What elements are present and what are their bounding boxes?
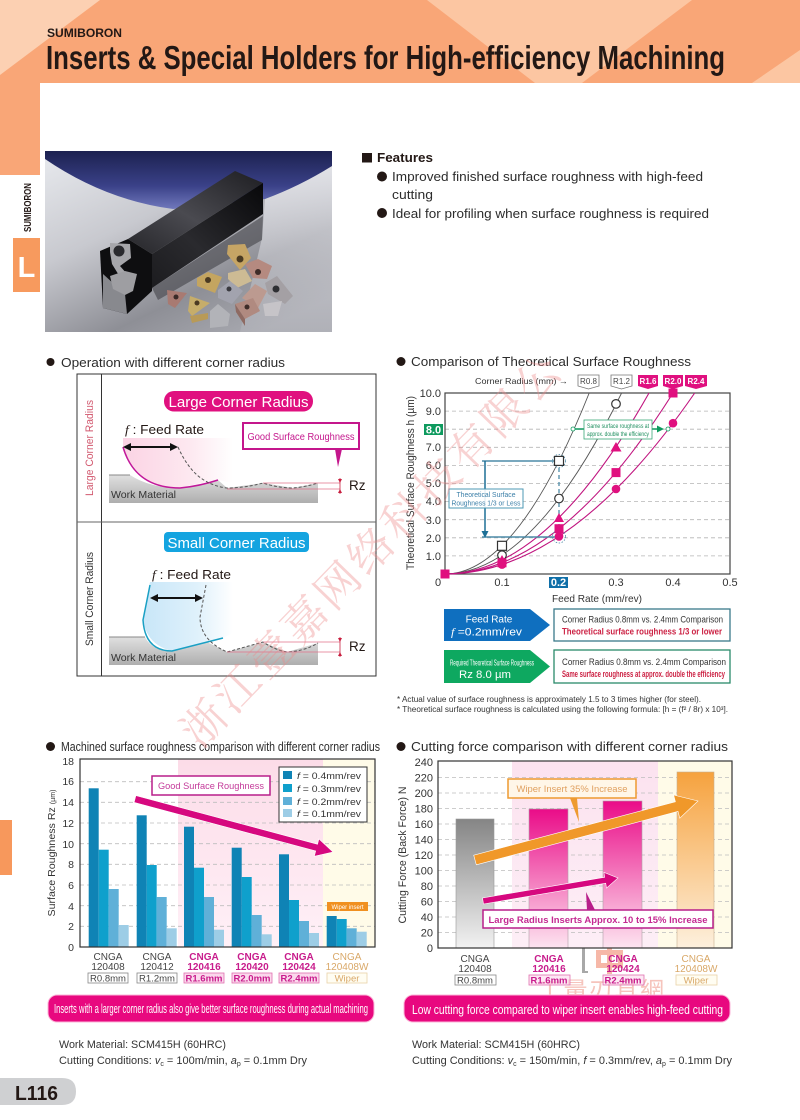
x label R1.2: CNGA	[143, 952, 172, 963]
efficiency callout	[584, 420, 652, 439]
large tool shade	[123, 438, 233, 488]
x axis labels: 0	[435, 577, 441, 589]
y axis labels: 220	[415, 772, 433, 784]
feature 2: Ideal for profiling when surface roughness is required	[392, 207, 709, 221]
y axis labels: 20	[421, 928, 433, 940]
x label R1.6	[184, 952, 224, 984]
roughness curves	[445, 393, 695, 574]
conditions: right chart: Cutting Conditions: v	[412, 1055, 513, 1067]
heading: machined roughness: Machined surface roughness comparison with different corner radius	[61, 740, 380, 754]
callout: feed rate: Feed Rate	[466, 614, 513, 626]
x label R1.6: 120416	[187, 962, 221, 973]
y axis labels: 6	[68, 880, 74, 892]
wiper insert tag: Wiper insert	[331, 905, 364, 911]
x label R2.4: 120424	[606, 964, 640, 975]
feature 1	[377, 170, 703, 202]
heading: operation: Operation with different corner radius	[61, 355, 286, 370]
corner radius key: Corner Radius (mm) →	[475, 376, 568, 386]
bars R1.2	[137, 815, 177, 947]
x label R2.4: CNGA	[608, 954, 638, 965]
small feed arrow	[150, 594, 203, 602]
bars R2.4	[279, 854, 319, 947]
conditions: left chart: c	[160, 1061, 164, 1068]
large tool outline	[123, 447, 218, 488]
chart frame	[80, 759, 375, 947]
bars R1.6	[184, 827, 224, 947]
conditions: left chart: = 0.1mm Dry	[241, 1055, 307, 1067]
plot frame and grid	[445, 393, 730, 574]
x label R2.4: R2.4mm	[605, 976, 641, 986]
banner: surface roughness conclusion: Inserts with a larger corner radius also give better surface roughness during actual machining	[54, 1001, 368, 1016]
feature 1: cutting	[392, 188, 433, 202]
wiper callout	[508, 779, 636, 822]
x label R1.2: 120412	[140, 962, 174, 973]
y axis labels: 4	[68, 901, 74, 913]
heading: cutting force: Cutting force comparison with different corner radius	[411, 739, 729, 754]
page header band	[0, 0, 800, 175]
small tool outline	[143, 585, 223, 651]
conditions: right chart: = 150m/min,	[517, 1055, 583, 1067]
x label R2.4: 120424	[282, 962, 316, 973]
side marker	[0, 820, 12, 875]
legend: f = 0.1mm/rev	[297, 809, 361, 820]
y axis labels: 5.0	[426, 478, 441, 490]
x label R2.0: CNGA	[237, 952, 267, 963]
theoretical 1/3 callout	[449, 489, 523, 508]
conditions: left chart: a	[231, 1055, 237, 1067]
large radius callout: Large Radius Inserts Approx. 10 to 15% Increase	[488, 915, 708, 926]
large Rz mark: Rz	[349, 478, 366, 493]
feature 1: Improved finished surface roughness with high-feed	[392, 170, 703, 184]
legend: f = 0.4mm/rev	[297, 771, 361, 782]
callout: feed rate	[444, 609, 550, 641]
callout: required roughness comparison	[554, 650, 730, 683]
corner radius key: R2.4	[688, 377, 705, 386]
y axis labels: 10	[62, 839, 74, 851]
bars wiper	[327, 916, 367, 947]
x label wiper: Wiper	[684, 976, 708, 986]
corner radius key: R0.8	[580, 377, 597, 386]
good surface roughness callout	[243, 423, 359, 467]
x axis title: Feed Rate (mm/rev)	[552, 593, 642, 605]
product photo	[45, 151, 332, 332]
large work material	[109, 475, 318, 503]
chart background	[438, 761, 732, 948]
markers R0.8	[498, 456, 564, 550]
conditions: left chart: = 100m/min,	[164, 1055, 231, 1067]
conditions: left chart: p	[237, 1061, 241, 1068]
small Rz mark	[227, 637, 366, 657]
banner: surface roughness conclusion	[48, 995, 374, 1022]
inserts	[167, 244, 293, 328]
y axis labels: 80	[421, 881, 433, 893]
good surface roughness callout	[152, 776, 270, 795]
y axis labels: 14	[62, 797, 74, 809]
x axis highlight 0.2: 0.2	[551, 577, 566, 589]
efficiency callout: Same surface roughness at	[587, 423, 649, 430]
x label wiper	[675, 954, 718, 986]
efficiency arrow	[571, 426, 670, 432]
corner radius key: R2.0	[665, 377, 682, 386]
y axis labels: 16	[62, 776, 74, 788]
comparison guides at feed 0.2	[482, 454, 566, 543]
y axis labels: 2	[68, 921, 74, 933]
footnotes: * Theoretical surface roughness is calculated using the following formula: [h = (f² / 8r) x 10³].	[397, 705, 728, 714]
wiper increase arrow	[474, 795, 698, 865]
y axis title: Theoretical Surface Roughness h (µm)	[405, 396, 417, 570]
y axis labels: 2.0	[426, 533, 441, 545]
theoretical 1/3 callout: Roughness 1/3 or Less	[452, 500, 521, 508]
x label R1.6	[529, 954, 570, 986]
markers R2.4	[498, 419, 677, 569]
x label R2.4	[279, 952, 319, 984]
large Rz mark	[227, 478, 366, 494]
x label R0.8: CNGA	[94, 952, 123, 963]
y axis labels: 9.0	[426, 406, 441, 418]
x label R0.8: R0.8mm	[457, 976, 493, 986]
y axis labels: 1.0	[426, 551, 441, 563]
watermark: lower logo	[538, 945, 666, 1006]
small radius pill: Small Corner Radius	[168, 535, 306, 552]
conditions: right chart: Work Material: SCM415H (60HRC)	[412, 1039, 580, 1051]
y axis labels: 100	[415, 866, 433, 878]
bar R1.6	[529, 809, 568, 948]
x label wiper: 120408W	[326, 962, 369, 973]
callout: required roughness: Rz 8.0 µm	[459, 669, 511, 681]
y axis labels: 10.0	[420, 388, 441, 400]
section tab: L	[13, 238, 40, 292]
conditions: left chart	[59, 1039, 307, 1068]
conditions: right chart	[412, 1039, 732, 1068]
x label wiper: CNGA	[682, 954, 711, 965]
y axis labels: 4.0	[426, 496, 441, 508]
callout: required roughness comparison: Corner Radius 0.8mm vs. 2.4mm Comparison	[562, 657, 726, 667]
y axis labels: 6.0	[426, 460, 441, 472]
small feed rate label: f : Feed Rate	[152, 567, 231, 582]
wiper insert tag	[327, 902, 368, 911]
markers R1.2	[498, 400, 620, 560]
y axis labels	[415, 757, 433, 955]
x label R2.4: CNGA	[284, 952, 314, 963]
callout: required roughness: Required Theoretical Surface Roughness	[450, 658, 534, 668]
features heading: Features	[377, 151, 433, 165]
x label R1.6: CNGA	[189, 952, 219, 963]
markers R1.6	[497, 442, 622, 564]
theoretical 1/3 callout: Theoretical Surface	[456, 492, 516, 499]
y axis title: Cutting Force (Back Force) N	[397, 786, 409, 924]
side label: SUMIBORON: SUMIBORON	[23, 183, 34, 232]
x axis labels	[435, 577, 738, 589]
trend arrow	[134, 796, 333, 856]
y axis labels: 140	[415, 834, 433, 846]
large radius increase arrow	[482, 872, 618, 904]
large tool previous pass	[178, 447, 318, 488]
y axis labels: 12	[62, 818, 74, 830]
legend	[279, 767, 367, 822]
y axis labels: 240	[415, 757, 433, 769]
y axis labels: 200	[415, 788, 433, 800]
side label large: Large Corner Radius	[84, 400, 96, 496]
large feed arrow	[123, 443, 178, 451]
y axis labels: 0	[427, 943, 433, 955]
corner radius key: R1.2	[613, 377, 630, 386]
x label R1.2	[137, 952, 177, 984]
page number: L116	[15, 1083, 58, 1105]
features list	[362, 151, 709, 221]
large work material: Work Material	[111, 489, 176, 501]
x label wiper: CNGA	[333, 952, 362, 963]
y axis labels: 3.0	[426, 515, 441, 527]
bar chart: cutting force	[397, 757, 732, 986]
x label R2.0	[232, 952, 272, 984]
x axis labels: 0.3	[608, 577, 624, 589]
callout: feed rate: f =0.2mm/rev	[451, 626, 523, 638]
clamp	[110, 243, 137, 295]
y axis labels: 7.0	[426, 442, 441, 454]
banner: cutting force conclusion: Low cutting force compared to wiper insert enables high-feed cutting	[412, 1002, 723, 1017]
x label R0.8: 120408	[458, 964, 492, 975]
x label R1.2: R1.2mm	[139, 974, 175, 984]
panel: corner radius diagrams	[77, 374, 376, 676]
good surface roughness callout: Good Surface Roughness	[158, 781, 264, 792]
y axis labels: 18	[62, 756, 74, 768]
conditions: left chart: Work Material: SCM415H (60HRC)	[59, 1039, 226, 1051]
x label R2.4: R2.4mm	[281, 974, 317, 984]
heading: theoretical roughness: Comparison of Theoretical Surface Roughness	[411, 354, 692, 369]
callout: required roughness	[444, 650, 550, 683]
x label R2.0: R2.0mm	[234, 974, 270, 984]
bar R2.4	[603, 801, 642, 948]
callout: feed rate comparison: Corner Radius 0.8mm vs. 2.4mm Comparison	[562, 614, 723, 624]
side label small: Small Corner Radius	[84, 552, 96, 646]
x label R1.6: R1.6mm	[531, 976, 567, 986]
x label wiper: Wiper	[335, 974, 359, 984]
footnotes: * Actual value of surface roughness is approximately 1.5 to 3 times higher (for steel).	[397, 695, 701, 704]
y axis labels	[62, 756, 74, 954]
x label R0.8	[455, 954, 496, 986]
x label R1.6: 120416	[532, 964, 566, 975]
x label R0.8	[88, 952, 128, 984]
small tool previous pass	[200, 585, 318, 652]
conditions: left chart: Cutting Conditions: v	[59, 1055, 160, 1067]
large feed rate label: f : Feed Rate	[125, 422, 204, 437]
callout: feed rate comparison	[554, 609, 730, 641]
watermark: lower logo: 工量刃具網	[538, 971, 666, 1006]
brand label: SUMIBORON	[47, 28, 122, 40]
y axis labels: 120	[415, 850, 433, 862]
page number	[0, 1078, 76, 1105]
chart background	[80, 759, 375, 947]
corner radius key	[475, 375, 707, 389]
y axis labels	[420, 388, 441, 563]
bar wiper	[677, 772, 714, 948]
bar R0.8	[456, 819, 494, 948]
x label R2.0: 120420	[235, 962, 269, 973]
small tool shade	[143, 582, 233, 651]
x label R0.8: CNGA	[461, 954, 490, 965]
legend: f = 0.2mm/rev	[297, 797, 361, 808]
small work material	[109, 637, 318, 665]
chart frame	[438, 761, 732, 948]
y axis labels: 60	[421, 896, 433, 908]
y axis labels: 180	[415, 804, 433, 816]
y axis labels: 8	[68, 859, 74, 871]
large radius callout	[483, 892, 713, 928]
large radius pill: Large Corner Radius	[168, 394, 308, 411]
x label wiper	[326, 952, 369, 984]
markers R2.0	[440, 388, 678, 578]
conditions: right chart: f = 0.3mm/rev, a	[583, 1055, 662, 1067]
banner: cutting force conclusion	[404, 995, 730, 1022]
wiper callout: Wiper Insert 35% Increase	[516, 784, 628, 795]
section tab: L: L	[18, 252, 35, 284]
x axis labels: 0.1	[494, 577, 510, 589]
x label wiper: 120408W	[675, 964, 718, 975]
conditions: right chart: = 0.1mm Dry	[666, 1055, 732, 1067]
callout: required roughness comparison: Same surface roughness at approx. double the efficiency	[562, 669, 725, 679]
conditions: right chart: c	[513, 1061, 517, 1068]
y axis labels: 40	[421, 912, 433, 924]
bar chart: surface roughness	[46, 756, 375, 984]
small Rz mark: Rz	[349, 639, 366, 654]
legend: f = 0.3mm/rev	[297, 784, 361, 795]
x label R1.6: CNGA	[534, 954, 564, 965]
good surface roughness callout: Good Surface Roughness	[248, 431, 354, 443]
x label R1.6: R1.6mm	[186, 974, 222, 984]
watermark: diagonal company name: 浙江壹嘉网络科技有限公	[163, 335, 576, 759]
y axis title: Surface Roughness Rz (µm)	[46, 790, 58, 916]
small work material: Work Material	[111, 652, 176, 664]
y axis highlight 8.0: 8.0	[426, 424, 441, 436]
conditions: right chart: p	[662, 1061, 666, 1068]
y axis labels: 0	[68, 942, 74, 954]
footnotes	[397, 695, 728, 714]
callout: feed rate comparison: Theoretical surface roughness 1/3 or lower	[562, 626, 722, 636]
bars R0.8	[89, 788, 129, 947]
x label R0.8: 120408	[91, 962, 125, 973]
bars R2.0	[232, 848, 272, 947]
corner radius key: R1.6	[640, 377, 657, 386]
efficiency callout: approx. double the efficiency	[587, 431, 650, 438]
x label R2.4	[603, 954, 644, 986]
y axis labels: 160	[415, 819, 433, 831]
x label R0.8: R0.8mm	[90, 974, 126, 984]
x axis labels: 0.4	[665, 577, 681, 589]
x axis labels: 0.5	[722, 577, 738, 589]
holder body	[100, 171, 263, 314]
line chart: theoretical surface roughness	[405, 375, 738, 605]
